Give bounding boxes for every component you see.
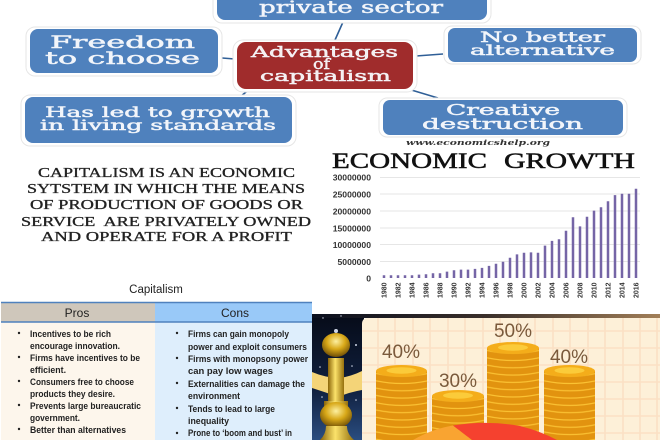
- x axis labels: 2002: [536, 282, 542, 298]
- percent labels: 30%: [439, 371, 477, 392]
- chart title: economic growth: GROWTH: [504, 148, 635, 173]
- chart title: economic growth: ECONOMIC: [332, 148, 487, 173]
- pros column: Firms have incentives to be: [30, 353, 140, 364]
- box: creative destruction: Creative: [446, 103, 560, 119]
- illustration: gold coins chart: [312, 314, 660, 440]
- x axis labels: 1992: [466, 282, 472, 298]
- source url: www.economicshelp.org: [406, 138, 550, 147]
- x axis labels: 2014: [620, 282, 626, 298]
- box: advantages of capitalism: [233, 40, 417, 92]
- pie chart: [413, 423, 557, 440]
- bar chart: economic growth 1980-2016: [333, 172, 640, 298]
- pros column: Better than alternatives: [30, 425, 126, 436]
- x axis labels: 2000: [522, 282, 528, 298]
- golden pole: [320, 333, 354, 440]
- box: freedom to choose: Freedom: [50, 33, 195, 53]
- box: advantages of capitalism: of: [313, 55, 332, 73]
- pros column: Incentives to be rich: [30, 329, 111, 340]
- y axis labels: 30000000: [333, 172, 371, 182]
- cons column: can pay low wages: [188, 366, 273, 377]
- definition text block: SERVICE ARE PRIVATELY OWNED: [21, 214, 311, 229]
- x axis labels: 2010: [592, 282, 598, 298]
- coin stack: 40%: [544, 365, 595, 440]
- x axis labels: 1986: [424, 282, 430, 298]
- pros column: encourage innovation.: [30, 341, 120, 352]
- x axis labels: 2006: [564, 282, 570, 298]
- x axis labels: 1980: [382, 282, 388, 298]
- cons column: Prone to ‘boom and bust’ in: [188, 428, 292, 439]
- box: advantages of capitalism: capitalism: [260, 67, 391, 85]
- cream grid panel: [362, 318, 660, 440]
- definition text block: [21, 165, 311, 244]
- cons column: environment: [188, 391, 241, 402]
- x axis labels: 1988: [438, 282, 444, 298]
- cons column: Externalities can damage the: [188, 379, 305, 390]
- x axis labels: 1990: [452, 282, 458, 298]
- box: creative destruction: destruction: [422, 117, 583, 133]
- definition text block: CAPITALISM IS AN ECONOMIC: [38, 165, 295, 180]
- cons column: power and exploit consumers: [188, 342, 307, 353]
- box: no better alternative: alternative: [470, 43, 615, 59]
- box: no better alternative: [444, 26, 641, 64]
- x axis labels: 2016: [634, 282, 640, 298]
- night sky background: [312, 314, 364, 440]
- x axis labels: 1998: [508, 282, 514, 298]
- coin stack: 50%: [487, 342, 539, 440]
- percent labels: [382, 321, 588, 392]
- cons column: Firms can gain monopoly: [188, 329, 290, 340]
- table rules: [1, 302, 312, 322]
- y axis labels: 5000000: [338, 257, 371, 267]
- table: capitalism pros and cons: [1, 284, 312, 440]
- x axis labels: 1984: [410, 282, 416, 298]
- cons bullets: [176, 332, 178, 434]
- stars: [319, 315, 357, 401]
- coin stack: 30%: [432, 390, 484, 440]
- x axis labels: [382, 282, 640, 298]
- x axis labels: 1996: [494, 282, 500, 298]
- cons column: inequality: [188, 416, 230, 427]
- bars: [384, 189, 636, 278]
- box: no better alternative: No better: [480, 30, 606, 46]
- x axis labels: 2012: [606, 282, 612, 298]
- definition text block: OF PRODUCTION OF GOODS OR: [30, 197, 303, 212]
- y axis labels: [333, 172, 371, 284]
- percent labels: 40%: [382, 342, 420, 363]
- y axis labels: 10000000: [333, 240, 371, 250]
- x axis labels: 1994: [480, 282, 486, 298]
- pros column: products they desire.: [30, 389, 115, 400]
- cons column: Tends to lead to large: [188, 404, 275, 415]
- box: private sector: [213, 0, 491, 23]
- x axis labels: 2004: [550, 282, 556, 298]
- y axis labels: 15000000: [333, 224, 371, 234]
- box: has led to growth: in living standards: [40, 118, 276, 134]
- pros column: Pros: [65, 306, 89, 320]
- pros column: [1, 302, 155, 440]
- box: creative destruction: [379, 98, 627, 137]
- x axis labels: 2008: [578, 282, 584, 298]
- definition text block: AND OPERATE FOR A PROFIT: [41, 229, 293, 244]
- connector lines: [222, 22, 443, 103]
- y axis labels: 25000000: [333, 190, 371, 200]
- pros column: government.: [30, 413, 80, 424]
- cons column: [155, 302, 312, 440]
- cons column: Firms with monopsony power: [188, 354, 308, 365]
- pros bullets: [18, 332, 20, 430]
- pros column: Consumers free to choose: [30, 377, 134, 388]
- box: has led to growth: [21, 95, 296, 146]
- y axis labels: 20000000: [333, 206, 371, 216]
- box: freedom to choose: [26, 27, 222, 76]
- y axis labels: 0: [366, 274, 371, 284]
- diagram: advantages of capitalism: [21, 0, 641, 147]
- percent labels: 40%: [550, 347, 588, 368]
- chart title: economic growth: [332, 148, 635, 173]
- coin stack: 40%: [376, 365, 427, 440]
- box: freedom to choose: to choose: [45, 49, 200, 69]
- cons column: Cons: [221, 306, 249, 320]
- ribbon: [312, 371, 362, 397]
- box: has led to growth: Has led to growth: [45, 105, 270, 121]
- pros column: Prevents large bureaucratic: [30, 401, 141, 412]
- pros column: efficient.: [30, 365, 66, 376]
- box: advantages of capitalism: Advantages: [249, 43, 398, 61]
- definition text block: SYTSTEM IN WHICH THE MEANS: [27, 181, 305, 196]
- x axis labels: 1982: [396, 282, 402, 298]
- table title: Capitalism: [129, 284, 183, 296]
- percent labels: 50%: [494, 321, 532, 342]
